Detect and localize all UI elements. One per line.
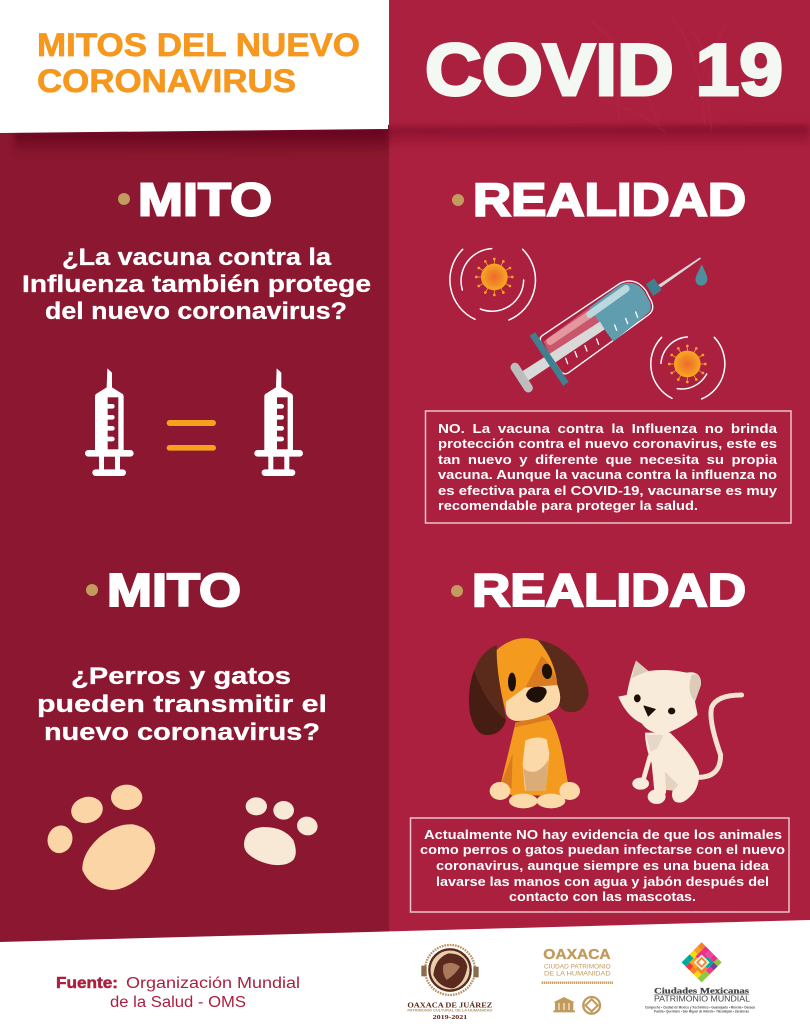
- logo: oaxaca ciudad patrimonio: DE LA HUMANIDAD: [544, 971, 611, 978]
- logo: oaxaca de juarez: PATRIMONIO CULTURAL DE LA HUMANIDAD: [407, 1009, 493, 1013]
- text box: pets answer: lavarse las manos con agua y jabón después del: [436, 874, 769, 889]
- source text: de la Salud - OMS: [110, 994, 246, 1011]
- logo: oaxaca de juarez: 2019-2021: [433, 1015, 467, 1021]
- question: pets: nuevo coronavirus?: [44, 719, 320, 746]
- logo: oaxaca de juarez: [407, 945, 493, 1021]
- question: pets: ¿Perros y gatos: [71, 663, 291, 690]
- icon: small paw: [244, 797, 320, 865]
- icon: cat: [618, 661, 742, 804]
- logo: ciudades mexicanas: Ciudades Mexicanas: [654, 986, 750, 995]
- panel: left myth background: [0, 125, 389, 950]
- logo: ciudades mexicanas: [645, 942, 755, 1013]
- text box: influenza answer: recomendable para proteger la salud.: [438, 498, 698, 513]
- source text: Fuente:: [56, 975, 118, 992]
- logo: ciudades mexicanas: Puebla • Querétaro • San Miguel de Allende • Tlacotalpan • Zacatecas: [654, 1009, 749, 1013]
- title: mitos del nuevo coronavirus: MITOS DEL NUEVO: [37, 27, 360, 63]
- heading: realidad 1: REALIDAD: [473, 174, 746, 226]
- text box: influenza answer: tan nuevo y diferente que necesita su propia: [438, 452, 778, 467]
- logo: oaxaca de juarez: OAXACA DE JUÁREZ: [407, 999, 492, 1009]
- icon: virus bottom right: [651, 337, 725, 399]
- text box: pets answer: contacto con las mascotas.: [509, 889, 696, 904]
- illustration: dog and cat: [469, 638, 742, 808]
- icon: dog: [469, 638, 588, 808]
- icon: large syringe: [515, 257, 707, 388]
- text box: influenza answer: protección contra el nuevo coronavirus, este es: [438, 436, 777, 451]
- question: pets: pueden transmitir el: [37, 691, 327, 718]
- text box: pets answer: Actualmente NO hay evidencia de que los animales: [424, 827, 782, 842]
- header shadow: [14, 125, 810, 156]
- text box: influenza answer: vacuna. Aunque la vacuna contra la influenza no: [438, 467, 777, 482]
- question: influenza vaccine: ¿La vacuna contra la: [62, 244, 331, 271]
- text box: influenza answer: es efectiva para el COVID-19, vacunarse es muy: [438, 483, 778, 498]
- question: influenza vaccine: [22, 244, 371, 325]
- logo: oaxaca ciudad patrimonio: [542, 947, 613, 1014]
- heading: mito 1: MITO: [138, 174, 272, 226]
- logo: ciudades mexicanas: PATRIMONIO MUNDIAL: [654, 994, 750, 1004]
- text box: pets answer: coronavirus, aunque siempre es una buena idea: [436, 858, 770, 873]
- title: mitos del nuevo coronavirus: [37, 27, 360, 99]
- logo: oaxaca ciudad patrimonio: CIUDAD PATRIMONIO: [544, 963, 611, 970]
- icon: paw prints: [44, 785, 320, 890]
- question: pets: [37, 663, 327, 746]
- heading: realidad 2: REALIDAD: [472, 564, 746, 616]
- panel: white title block: [0, 0, 388, 133]
- panel: white footer: [0, 920, 810, 1034]
- icon: virus top left: [450, 249, 535, 320]
- icon: syringe equals syringe: [85, 368, 303, 476]
- question: influenza vaccine: del nuevo coronavirus?: [45, 298, 347, 325]
- title: mitos del nuevo coronavirus: CORONAVIRUS: [37, 63, 296, 99]
- title: covid 19: COVID 19: [425, 30, 783, 111]
- source text: [56, 975, 300, 1011]
- illustration: syringe and viruses: [450, 249, 725, 399]
- logo: oaxaca ciudad patrimonio: OAXACA: [543, 947, 611, 963]
- text box: pets answer: [410, 818, 789, 912]
- text box: influenza answer: NO. La vacuna contra la Influenza no brinda: [438, 421, 778, 436]
- icon: large paw: [44, 785, 155, 890]
- logos: [407, 942, 755, 1021]
- text box: pets answer: como perros o gatos puedan infectarse con el nuevo: [420, 842, 785, 857]
- source text: Organización Mundial: [126, 975, 300, 992]
- text box: influenza answer: [426, 411, 791, 523]
- logo: ciudades mexicanas: Campeche • Ciudad de México y Xochimilco • Guanajuato • Morelia • Oaxaca: [645, 1005, 755, 1009]
- heading: mito 2: MITO: [107, 564, 241, 616]
- panel: right reality background: [389, 0, 810, 950]
- question: influenza vaccine: Influenza también protege: [22, 271, 371, 298]
- decorative header engraving: [590, 15, 725, 132]
